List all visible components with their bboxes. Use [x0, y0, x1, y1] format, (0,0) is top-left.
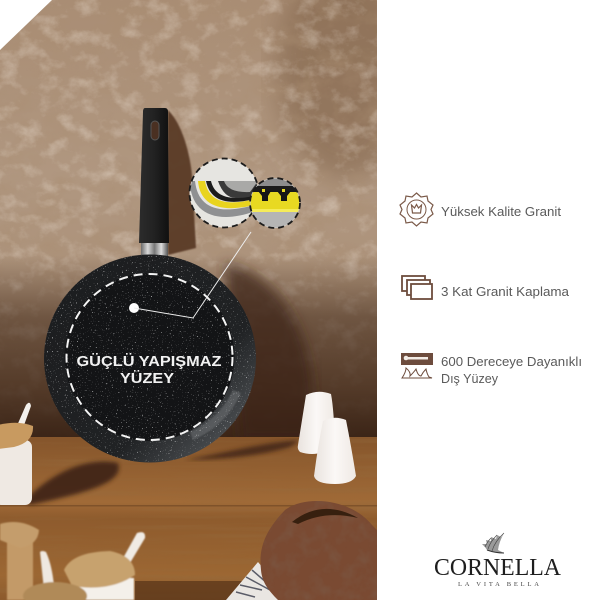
text: 3 Kat Granit Kaplama	[441, 285, 569, 299]
pan body with granite surface	[44, 254, 256, 463]
text: Dış Yüzey	[441, 372, 499, 386]
text: Yüksek Kalite Granit	[441, 205, 562, 219]
frying pan	[44, 108, 256, 463]
pan label: YÜZEY	[120, 370, 174, 387]
text	[441, 355, 582, 386]
white side panel	[377, 0, 600, 600]
small inset circle	[250, 178, 300, 229]
large inset circle	[190, 158, 260, 228]
feature: 3 layer granite coating	[402, 276, 569, 299]
inset: pan layer cross-section	[190, 158, 300, 229]
jar with wooden lid and spoon	[0, 403, 33, 505]
salt and pepper shakers	[298, 392, 356, 484]
tagline: LA VITA BELLA	[458, 581, 539, 588]
wordmark: CORNELLA	[434, 555, 562, 581]
pan label	[76, 353, 222, 387]
pan label: GÜÇLÜ YAPIŞMAZ	[76, 353, 222, 370]
text: 600 Dereceye Dayanıklı	[441, 355, 582, 369]
icon: stacked layers	[402, 276, 432, 299]
icon: crown badge	[400, 193, 433, 226]
icon: heat resistant surface	[401, 353, 433, 378]
callout leader line	[129, 232, 251, 318]
feature: high quality granite	[400, 193, 562, 226]
logo: Cornella	[434, 533, 562, 588]
icon: feather fan	[482, 533, 504, 553]
corner fold	[0, 0, 52, 50]
foreground wooden and ceramic items	[0, 522, 145, 600]
bread loaf on striped cloth	[226, 497, 377, 600]
wooden table	[0, 437, 377, 600]
photo background: plaster wall	[0, 0, 415, 440]
pan handle	[139, 108, 169, 256]
feature: 600 degree resistant exterior	[401, 353, 582, 386]
dashed circle outline	[66, 274, 232, 440]
